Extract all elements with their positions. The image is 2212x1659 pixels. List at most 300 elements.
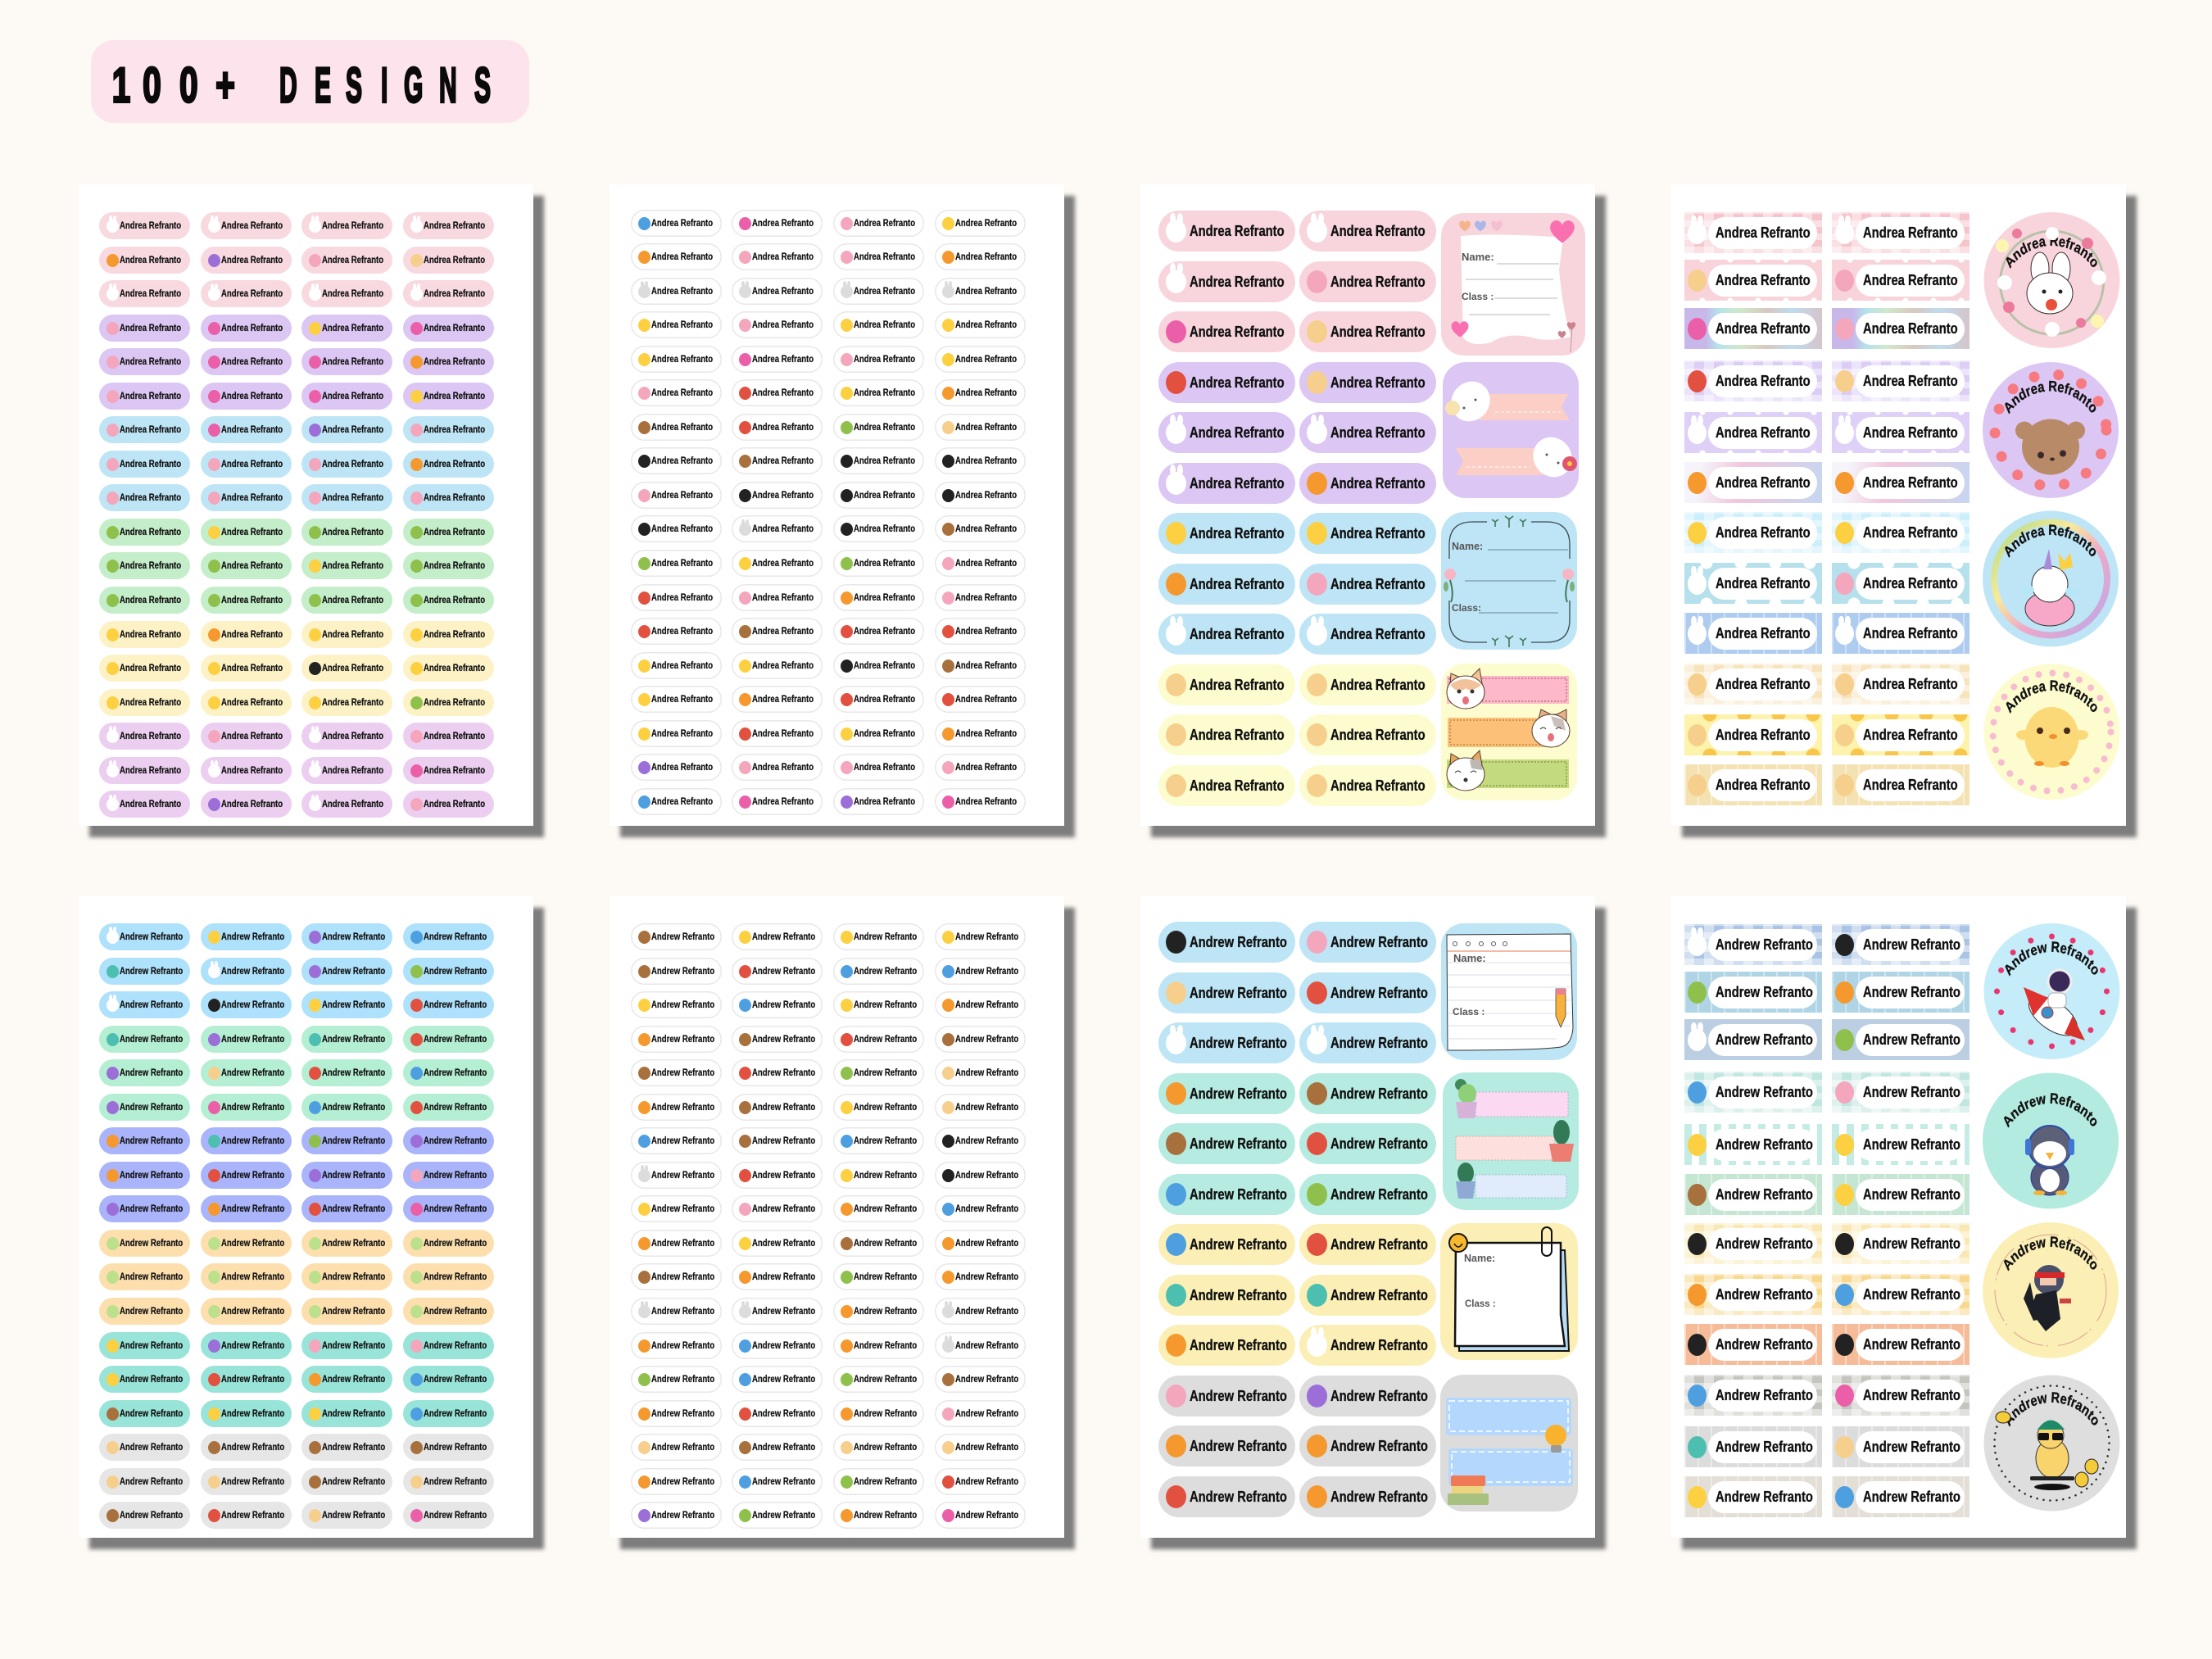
label grid: sheet 5: Andrew Refranto	[424, 1135, 487, 1146]
label grid: sheet 1: Andrea Refranto	[322, 459, 383, 469]
label grid: sheet 2: Andrea Refranto	[752, 456, 814, 466]
label row: pale yellow gingham	[1684, 1223, 1969, 1264]
label row: grey gingham: Andrew Refranto	[1863, 1386, 1960, 1403]
label grid: sheet 5: Andrew Refranto	[221, 966, 284, 977]
label grid: sheet 2	[631, 210, 1026, 815]
label grid: sheet 6: Andrew Refranto	[752, 1203, 815, 1214]
label grid: sheet 6: Andrew Refranto	[854, 999, 917, 1010]
label row: pale yellow gingham: Andrew Refranto	[1716, 1235, 1813, 1252]
label grid: sheet 6: Andrew Refranto	[854, 1408, 917, 1419]
label grid: sheet 1: Andrea Refranto	[322, 765, 383, 776]
label grid: sheet 2: Andrea Refranto	[854, 320, 915, 330]
round sticker: bunny with wreath: Andrea Refranto	[2006, 238, 2097, 269]
label grid: sheet 3: Andrea Refranto	[1190, 727, 1285, 743]
label grid: sheet 6: Andrew Refranto	[752, 1408, 815, 1419]
label row: pink flowers: Andrea Refranto	[1863, 272, 1958, 288]
label grid: sheet 3: Andrea Refranto	[1330, 727, 1426, 743]
label grid: sheet 2: Andrea Refranto	[752, 252, 814, 262]
label grid: sheet 5: Andrew Refranto	[322, 931, 386, 942]
panel: sheet 2, white outlined labels	[610, 184, 1064, 826]
round sticker: bunny with wreath	[1984, 212, 2120, 348]
label grid: sheet 6: Andrew Refranto	[651, 1476, 714, 1487]
label row: tan gingham: Andrea Refranto	[1863, 675, 1958, 691]
label grid: sheet 6: Andrew Refranto	[752, 999, 815, 1010]
label grid: sheet 5: Andrew Refranto	[424, 1340, 487, 1351]
label row: pink to blue gradient: Andrea Refranto	[1863, 474, 1958, 490]
label grid: sheet 5: Andrew Refranto	[322, 1203, 386, 1214]
label row: pink flowers: Andrea Refranto	[1716, 272, 1811, 288]
label grid: sheet 7: Andrew Refranto	[1190, 1236, 1287, 1253]
round sticker: astronaut on rocket: Andrew Refranto	[2005, 941, 2098, 977]
label row: peach stripes	[1684, 1324, 1969, 1365]
label grid: sheet 7: Andrew Refranto	[1190, 1388, 1287, 1404]
label grid: sheet 2: Andrea Refranto	[752, 524, 814, 534]
label grid: sheet 5: Andrew Refranto	[322, 1102, 386, 1113]
label row: rainbow stripes	[1684, 308, 1969, 349]
label grid: sheet 5: Andrew Refranto	[322, 1306, 386, 1317]
label grid: sheet 2: Andrea Refranto	[752, 388, 814, 398]
label grid: sheet 3: Andrea Refranto	[1190, 424, 1285, 441]
round sticker: ninja kicking	[1983, 1222, 2119, 1358]
label grid: sheet 2: Andrea Refranto	[955, 490, 1017, 501]
label grid: sheet 2: Andrea Refranto	[854, 422, 915, 433]
label grid: sheet 1: Andrea Refranto	[424, 356, 485, 367]
label grid: sheet 7: Andrew Refranto	[1190, 1135, 1287, 1152]
label grid: sheet 5: Andrew Refranto	[221, 1408, 284, 1419]
label grid: sheet 7: Andrew Refranto	[1190, 1086, 1287, 1102]
label grid: sheet 5: Andrew Refranto	[120, 1067, 183, 1078]
label grid: sheet 2: Andrea Refranto	[955, 524, 1017, 534]
label grid: sheet 6: Andrew Refranto	[854, 1476, 917, 1487]
label row: blue stripes: Andrea Refranto	[1716, 624, 1811, 641]
label grid: sheet 6: Andrew Refranto	[752, 1102, 815, 1113]
label grid: sheet 2: Andrea Refranto	[752, 762, 814, 773]
label grid: sheet 1: Andrea Refranto	[322, 255, 383, 265]
label grid: sheet 5	[99, 923, 494, 1529]
label grid: sheet 2: Andrea Refranto	[752, 626, 814, 637]
label row: rainbow stripes: Andrea Refranto	[1863, 320, 1958, 336]
label grid: sheet 5: Andrew Refranto	[120, 999, 183, 1010]
label grid: sheet 5: Andrew Refranto	[120, 1442, 183, 1453]
label grid: sheet 1: Andrea Refranto	[120, 323, 181, 333]
label row: sky gingham: Andrea Refranto	[1716, 524, 1811, 541]
label grid: sheet 7: Andrew Refranto	[1190, 985, 1287, 1001]
label row: mint gingham	[1684, 1072, 1969, 1113]
label grid: sheet 6: Andrew Refranto	[955, 1203, 1018, 1214]
label row: blue plaid: Andrew Refranto	[1716, 1031, 1813, 1047]
label grid: sheet 1: Andrea Refranto	[424, 492, 485, 503]
card: pink name and class card with hearts	[1441, 213, 1585, 356]
label grid: sheet 5: Andrew Refranto	[120, 966, 183, 977]
round sticker: unicorn with rainbow ring: Andrea Refranto	[2005, 524, 2096, 558]
label grid: sheet 7: Andrew Refranto	[1190, 1489, 1287, 1505]
label grid: sheet 2: Andrea Refranto	[651, 388, 713, 398]
label grid: sheet 7: Andrew Refranto	[1330, 1135, 1428, 1152]
label grid: sheet 2: Andrea Refranto	[651, 320, 713, 330]
label grid: sheet 6: Andrew Refranto	[955, 1340, 1018, 1351]
label grid: sheet 3: Andrea Refranto	[1190, 475, 1285, 492]
label grid: sheet 6: Andrew Refranto	[651, 1203, 714, 1214]
label grid: sheet 1: Andrea Refranto	[120, 255, 181, 265]
label row: mint stripes: Andrew Refranto	[1863, 1135, 1960, 1152]
label grid: sheet 1: Andrea Refranto	[221, 356, 283, 367]
label grid: sheet 5: Andrew Refranto	[424, 999, 487, 1010]
card: blue name frame with sprouts: Class:	[1452, 602, 1481, 614]
label grid: sheet 7: Andrew Refranto	[1190, 1337, 1287, 1353]
label grid: sheet 6: Andrew Refranto	[854, 966, 917, 977]
label grid: sheet 1: Andrea Refranto	[424, 595, 485, 605]
card: mint dotted boxes with cacti	[1443, 1072, 1579, 1210]
label row: peach stripes: Andrew Refranto	[1863, 1335, 1960, 1352]
label row: blue stripes: Andrew Refranto	[1716, 983, 1813, 999]
label row: lilac flowers: Andrea Refranto	[1863, 424, 1958, 441]
label grid: sheet 5: Andrew Refranto	[424, 1102, 487, 1113]
label grid: sheet 6: Andrew Refranto	[955, 1135, 1018, 1146]
label row: blue with daisies: Andrea Refranto	[1716, 575, 1811, 592]
label row: pink gingham: Andrea Refranto	[1863, 224, 1958, 241]
label grid: sheet 6: Andrew Refranto	[854, 1510, 917, 1521]
label grid: sheet 5: Andrew Refranto	[322, 1170, 386, 1181]
label grid: sheet 3: Andrea Refranto	[1190, 374, 1285, 391]
label row: light grey grid	[1684, 1426, 1969, 1467]
label grid: sheet 1: Andrea Refranto	[424, 663, 485, 673]
label grid: sheet 1: Andrea Refranto	[120, 560, 181, 571]
label grid: sheet 1: Andrea Refranto	[120, 765, 181, 776]
label grid: sheet 6: Andrew Refranto	[651, 1034, 714, 1045]
label grid: sheet 3: Andrea Refranto	[1190, 324, 1285, 340]
label grid: sheet 7: Andrew Refranto	[1190, 1438, 1287, 1454]
label grid: sheet 2: Andrea Refranto	[854, 728, 915, 739]
label grid: sheet 6: Andrew Refranto	[651, 1374, 714, 1385]
label row: pink gingham: Andrea Refranto	[1716, 224, 1811, 241]
label grid: sheet 1: Andrea Refranto	[322, 391, 383, 401]
label row: soft green	[1684, 1174, 1969, 1215]
label grid: sheet 5: Andrew Refranto	[221, 1442, 284, 1453]
label grid: sheet 1: Andrea Refranto	[322, 220, 383, 231]
label grid: sheet 3: Andrea Refranto	[1330, 777, 1426, 794]
label row: yellow gingham	[1684, 1274, 1969, 1315]
label grid: sheet 2: Andrea Refranto	[752, 218, 814, 228]
label grid: sheet 7: Andrew Refranto	[1330, 1086, 1428, 1102]
label grid: sheet 5: Andrew Refranto	[424, 1510, 487, 1521]
label grid: sheet 2: Andrea Refranto	[752, 558, 814, 569]
label grid: sheet 3: Andrea Refranto	[1190, 223, 1285, 239]
label grid: sheet 2: Andrea Refranto	[955, 286, 1017, 297]
round sticker: penguin with headphones: Andrew Refranto	[2004, 1093, 2097, 1128]
label grid: sheet 2: Andrea Refranto	[955, 456, 1017, 466]
label grid: sheet 1: Andrea Refranto	[322, 288, 383, 299]
label row: pink flowers	[1684, 260, 1969, 301]
label grid: sheet 7: Andrew Refranto	[1190, 1035, 1287, 1051]
panel: sheet 6, white outlined labels	[610, 896, 1064, 1538]
label grid: sheet 6: Andrew Refranto	[752, 1135, 815, 1146]
label row: pink to blue gradient: Andrea Refranto	[1716, 474, 1811, 490]
label grid: sheet 2: Andrea Refranto	[854, 592, 915, 603]
label grid: sheet 2: Andrea Refranto	[955, 592, 1017, 603]
label row: yellow gingham: Andrew Refranto	[1716, 1286, 1813, 1303]
label grid: sheet 6: Andrew Refranto	[752, 1510, 815, 1521]
label grid: sheet 5: Andrew Refranto	[221, 1135, 284, 1146]
label row: beige stripes	[1684, 1476, 1969, 1517]
label grid: sheet 5: Andrew Refranto	[120, 1476, 183, 1487]
label row: blue plaid	[1684, 1019, 1969, 1060]
label grid: sheet 6: Andrew Refranto	[854, 1238, 917, 1249]
label row: lilac gingham: Andrea Refranto	[1716, 372, 1811, 388]
round sticker: ninja kicking: Andrew Refranto	[2004, 1236, 2097, 1271]
label grid: sheet 1: Andrea Refranto	[322, 492, 383, 503]
label grid: sheet 6: Andrew Refranto	[854, 1306, 917, 1317]
label grid: sheet 2: Andrea Refranto	[854, 762, 915, 773]
label grid: sheet 7: Andrew Refranto	[1330, 1388, 1428, 1404]
label grid: sheet 1: Andrea Refranto	[221, 288, 283, 299]
label grid: sheet 1: Andrea Refranto	[120, 731, 181, 741]
label grid: sheet 2: Andrea Refranto	[854, 286, 915, 297]
card: yellow note with paper clip and smiley: Class :	[1465, 1299, 1496, 1309]
label grid: sheet 3: Andrea Refranto	[1190, 677, 1285, 693]
label grid: sheet 2: Andrea Refranto	[752, 490, 814, 501]
label row: pale yellow gingham: Andrew Refranto	[1863, 1235, 1960, 1252]
round sticker: bear with flowers: Andrea Refranto	[2005, 380, 2096, 415]
label grid: sheet 1: Andrea Refranto	[221, 459, 283, 469]
label grid: sheet 6: Andrew Refranto	[651, 999, 714, 1010]
label grid: sheet 6: Andrew Refranto	[752, 1476, 815, 1487]
label grid: sheet 2: Andrea Refranto	[955, 626, 1017, 637]
label grid: sheet 2: Andrea Refranto	[651, 558, 713, 569]
label grid: sheet 5: Andrew Refranto	[424, 931, 487, 942]
label grid: sheet 5: Andrew Refranto	[221, 1034, 284, 1045]
label grid: sheet 5: Andrew Refranto	[221, 1306, 284, 1317]
label grid: sheet 2: Andrea Refranto	[651, 728, 713, 739]
label grid: sheet 7	[1158, 922, 1436, 1517]
label grid: sheet 1: Andrea Refranto	[322, 731, 383, 741]
label grid: sheet 1: Andrea Refranto	[424, 527, 485, 537]
label grid: sheet 5: Andrew Refranto	[322, 1067, 386, 1078]
label grid: sheet 7: Andrew Refranto	[1190, 1186, 1287, 1203]
label grid: sheet 5: Andrew Refranto	[221, 1102, 284, 1113]
label grid: sheet 2: Andrea Refranto	[854, 490, 915, 501]
label grid: sheet 5: Andrew Refranto	[424, 1034, 487, 1045]
label grid: sheet 2: Andrea Refranto	[854, 218, 915, 228]
label grid: sheet 5: Andrew Refranto	[424, 1238, 487, 1249]
label grid: sheet 1: Andrea Refranto	[424, 255, 485, 265]
label grid: sheet 2: Andrea Refranto	[854, 626, 915, 637]
label grid: sheet 2: Andrea Refranto	[752, 728, 814, 739]
label grid: sheet 1: Andrea Refranto	[322, 595, 383, 605]
label row: soft green: Andrew Refranto	[1863, 1186, 1960, 1203]
label grid: sheet 6: Andrew Refranto	[651, 1135, 714, 1146]
label grid: sheet 1: Andrea Refranto	[424, 459, 485, 469]
card: pink name and class card with hearts: Name:	[1462, 251, 1494, 263]
label grid: sheet 6: Andrew Refranto	[955, 931, 1018, 942]
card: blue name frame with sprouts	[1441, 512, 1577, 650]
label grid: sheet 5: Andrew Refranto	[221, 999, 284, 1010]
card: purple ribbons with bunnies	[1443, 362, 1579, 498]
label row: yellow blossoms: Andrea Refranto	[1716, 726, 1811, 742]
card: yellow bars with cats	[1441, 664, 1577, 800]
label row: blue gingham: Andrew Refranto	[1863, 936, 1960, 952]
label grid: sheet 6: Andrew Refranto	[955, 1408, 1018, 1419]
label grid: sheet 1: Andrea Refranto	[322, 663, 383, 673]
label grid: sheet 3: Andrea Refranto	[1330, 274, 1426, 290]
label grid: sheet 1: Andrea Refranto	[424, 765, 485, 776]
label row: blue stripes	[1684, 972, 1969, 1013]
label grid: sheet 2: Andrea Refranto	[955, 218, 1017, 228]
label grid: sheet 7: Andrew Refranto	[1330, 1337, 1428, 1353]
label grid: sheet 5: Andrew Refranto	[424, 1374, 487, 1385]
label grid: sheet 5: Andrew Refranto	[322, 1510, 386, 1521]
label row: mint stripes: Andrew Refranto	[1716, 1135, 1813, 1152]
label grid: sheet 3: Andrea Refranto	[1330, 475, 1426, 492]
label grid: sheet 5: Andrew Refranto	[322, 1374, 386, 1385]
label grid: sheet 1: Andrea Refranto	[120, 492, 181, 503]
label grid: sheet 3: Andrea Refranto	[1330, 374, 1426, 391]
label grid: sheet 1: Andrea Refranto	[424, 220, 485, 231]
label grid: sheet 1: Andrea Refranto	[424, 424, 485, 435]
label grid: sheet 2: Andrea Refranto	[854, 558, 915, 569]
label grid: sheet 5: Andrew Refranto	[221, 1510, 284, 1521]
label row: tan stripes: Andrea Refranto	[1716, 777, 1811, 793]
label grid: sheet 2: Andrea Refranto	[651, 490, 713, 501]
label grid: sheet 7: Andrew Refranto	[1330, 934, 1428, 950]
label grid: sheet 3: Andrea Refranto	[1330, 677, 1426, 693]
label grid: sheet 6: Andrew Refranto	[854, 1170, 917, 1181]
label row: pink gingham	[1684, 212, 1969, 253]
label grid: sheet 5: Andrew Refranto	[120, 1340, 183, 1351]
label grid: sheet 5: Andrew Refranto	[221, 1340, 284, 1351]
label grid: sheet 6: Andrew Refranto	[955, 1034, 1018, 1045]
round sticker: chick with flower ring	[1984, 664, 2120, 800]
label grid: sheet 2: Andrea Refranto	[854, 524, 915, 534]
label grid: sheet 1: Andrea Refranto	[221, 629, 283, 640]
label grid: sheet 2: Andrea Refranto	[651, 524, 713, 534]
label grid: sheet 6: Andrew Refranto	[955, 1067, 1018, 1078]
label row: mint gingham: Andrew Refranto	[1716, 1083, 1813, 1099]
label grid: sheet 5: Andrew Refranto	[221, 1374, 284, 1385]
label row: blue with daisies	[1684, 563, 1969, 604]
label grid: sheet 6: Andrew Refranto	[752, 1442, 815, 1453]
label grid: sheet 1: Andrea Refranto	[221, 560, 283, 571]
label grid: sheet 2: Andrea Refranto	[752, 286, 814, 297]
round sticker: unicorn with rainbow ring	[1983, 511, 2119, 647]
label grid: sheet 2: Andrea Refranto	[651, 456, 713, 466]
panel: sheet 4, patterned labels with round stickers	[1671, 184, 2126, 826]
label row: sky gingham: Andrea Refranto	[1863, 524, 1958, 541]
label grid: sheet 2: Andrea Refranto	[651, 252, 713, 262]
label grid: sheet 6: Andrew Refranto	[651, 1442, 714, 1453]
label grid: sheet 1: Andrea Refranto	[221, 765, 283, 776]
label grid: sheet 6: Andrew Refranto	[955, 1442, 1018, 1453]
label grid: sheet 2: Andrea Refranto	[854, 694, 915, 705]
label grid: sheet 6: Andrew Refranto	[651, 931, 714, 942]
label grid: sheet 2: Andrea Refranto	[955, 796, 1017, 807]
round sticker: duck on skateboard with bees: Andrew Refranto	[2007, 1392, 2098, 1427]
label grid: sheet 6: Andrew Refranto	[752, 1067, 815, 1078]
round sticker: astronaut on rocket	[1983, 923, 2120, 1059]
label grid: sheet 2: Andrea Refranto	[854, 660, 915, 671]
label grid: sheet 5: Andrew Refranto	[221, 1170, 284, 1181]
label grid: sheet 6: Andrew Refranto	[955, 1306, 1018, 1317]
panel: sheet 3, large pastel labels with name cards	[1140, 184, 1595, 826]
label row: lilac flowers	[1684, 412, 1969, 453]
label grid: sheet 5: Andrew Refranto	[322, 1442, 386, 1453]
label grid: sheet 6: Andrew Refranto	[651, 1271, 714, 1282]
label grid: sheet 6: Andrew Refranto	[752, 1170, 815, 1181]
label grid: sheet 3: Andrea Refranto	[1330, 626, 1426, 642]
label grid: sheet 6: Andrew Refranto	[651, 1067, 714, 1078]
label grid: sheet 3: Andrea Refranto	[1330, 223, 1426, 239]
label grid: sheet 6: Andrew Refranto	[651, 1408, 714, 1419]
label grid: sheet 6: Andrew Refranto	[651, 1340, 714, 1351]
label grid: sheet 5: Andrew Refranto	[120, 1238, 183, 1249]
label grid: sheet 5: Andrew Refranto	[221, 931, 284, 942]
label grid: sheet 1: Andrea Refranto	[120, 527, 181, 537]
label grid: sheet 5: Andrew Refranto	[322, 1238, 386, 1249]
label row: sky gingham	[1684, 512, 1969, 553]
label grid: sheet 5: Andrew Refranto	[322, 1340, 386, 1351]
label grid: sheet 3: Andrea Refranto	[1190, 626, 1285, 642]
label grid: sheet 5: Andrew Refranto	[322, 999, 386, 1010]
label grid: sheet 2: Andrea Refranto	[955, 320, 1017, 330]
label grid: sheet 2: Andrea Refranto	[651, 592, 713, 603]
label grid: sheet 2: Andrea Refranto	[854, 456, 915, 466]
label grid: sheet 1: Andrea Refranto	[120, 220, 181, 231]
label grid: sheet 2: Andrea Refranto	[854, 796, 915, 807]
label grid: sheet 6: Andrew Refranto	[854, 1442, 917, 1453]
label grid: sheet 1: Andrea Refranto	[221, 799, 283, 809]
label grid: sheet 5: Andrew Refranto	[322, 1271, 386, 1282]
label row: rainbow stripes: Andrea Refranto	[1716, 320, 1811, 336]
label grid: sheet 1: Andrea Refranto	[424, 560, 485, 571]
label grid: sheet 6: Andrew Refranto	[854, 1034, 917, 1045]
label grid: sheet 6: Andrew Refranto	[854, 1102, 917, 1113]
label grid: sheet 1: Andrea Refranto	[424, 697, 485, 708]
round sticker: penguin with headphones	[1983, 1072, 2119, 1209]
label grid: sheet 1: Andrea Refranto	[120, 697, 181, 708]
label grid: sheet 5: Andrew Refranto	[424, 1408, 487, 1419]
label grid: sheet 7: Andrew Refranto	[1330, 1489, 1428, 1505]
label row: beige stripes: Andrew Refranto	[1863, 1488, 1960, 1504]
label grid: sheet 6: Andrew Refranto	[955, 1238, 1018, 1249]
label grid: sheet 7: Andrew Refranto	[1330, 1438, 1428, 1454]
label grid: sheet 2: Andrea Refranto	[651, 422, 713, 433]
label grid: sheet 1: Andrea Refranto	[322, 356, 383, 367]
label grid: sheet 6: Andrew Refranto	[955, 1510, 1018, 1521]
card: blue name frame with sprouts: Name:	[1452, 541, 1483, 552]
label grid: sheet 5: Andrew Refranto	[120, 1271, 183, 1282]
label row: soft green: Andrew Refranto	[1716, 1186, 1813, 1203]
label grid: sheet 5: Andrew Refranto	[120, 1102, 183, 1113]
label grid: sheet 2: Andrea Refranto	[651, 660, 713, 671]
card: grey dashed boxes with bulb and books	[1440, 1375, 1578, 1512]
label grid: sheet 6: Andrew Refranto	[955, 1374, 1018, 1385]
label grid: sheet 6: Andrew Refranto	[955, 966, 1018, 977]
label grid: sheet 2: Andrea Refranto	[651, 796, 713, 807]
label grid: sheet 2: Andrea Refranto	[955, 660, 1017, 671]
label grid: sheet 6: Andrew Refranto	[651, 1170, 714, 1181]
card: yellow note with paper clip and smiley: Name:	[1464, 1253, 1495, 1264]
label grid: sheet 5: Andrew Refranto	[322, 1034, 386, 1045]
label grid: sheet 5: Andrew Refranto	[120, 1170, 183, 1181]
label grid: sheet 6: Andrew Refranto	[752, 1034, 815, 1045]
label grid: sheet 3: Andrea Refranto	[1190, 777, 1285, 794]
label grid: sheet 5: Andrew Refranto	[424, 1271, 487, 1282]
label grid: sheet 2: Andrea Refranto	[955, 354, 1017, 365]
label row: light grey grid: Andrew Refranto	[1716, 1439, 1813, 1455]
title badge: 100+ designs: DESIGNS	[279, 58, 491, 113]
label grid: sheet 3: Andrea Refranto	[1330, 424, 1426, 441]
label grid: sheet 6: Andrew Refranto	[854, 1374, 917, 1385]
label row: tan gingham: Andrea Refranto	[1716, 675, 1811, 691]
